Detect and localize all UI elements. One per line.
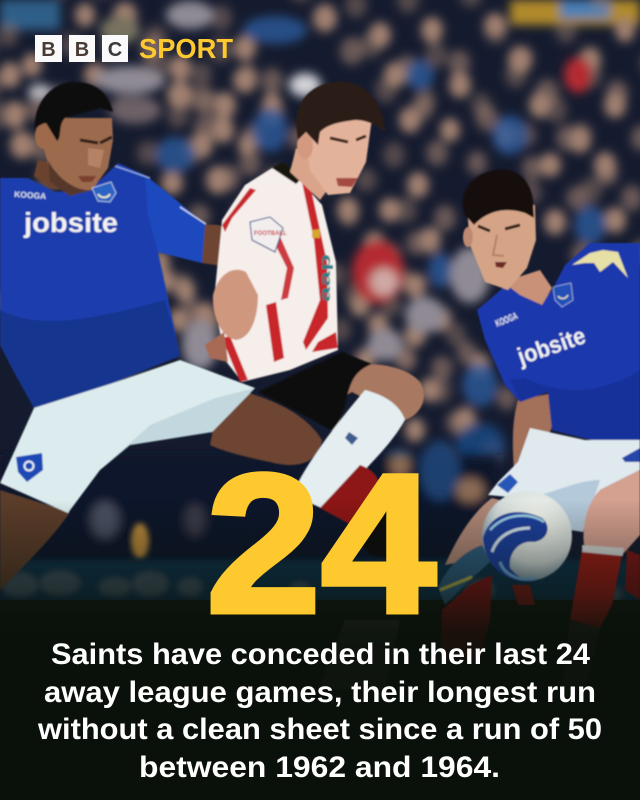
shirt badge (92, 182, 116, 202)
chest badge (312, 229, 320, 238)
lower leg dark (348, 492, 400, 560)
shorts badge (16, 453, 43, 482)
kit maker text: KOOGA (14, 189, 47, 201)
big number: 24 (206, 433, 436, 654)
neck (503, 270, 552, 305)
shorts (488, 428, 640, 530)
caption text (37, 638, 602, 784)
face (467, 205, 536, 290)
shirt sponsor: jobsite (23, 207, 118, 238)
BBC Sport logo: C (108, 39, 122, 61)
striped shirt (214, 168, 338, 382)
caption text: without a clean sheet since a run of 50 (37, 713, 602, 746)
hair (296, 82, 385, 145)
caption text: between 1962 and 1964. (139, 751, 500, 784)
white sock (292, 390, 405, 512)
BBC Sport logo: B (75, 39, 89, 61)
BBC Sport logo: SPORT (139, 33, 233, 64)
crowd heads (0, 2, 635, 442)
neck (34, 160, 92, 192)
player: Southampton midfielder, centre (205, 82, 424, 560)
other arm towards ball (445, 498, 500, 565)
left thigh and back leg (0, 490, 70, 590)
shirt badge (553, 283, 573, 307)
dark gradient overlay (0, 500, 640, 800)
shirt sponsor: jobsite (513, 322, 589, 371)
player: Southampton midfielder, centre: FOOTBALL (254, 231, 287, 237)
shirt (0, 163, 206, 408)
red socks (440, 575, 492, 660)
arm (513, 392, 558, 470)
BBC Sport logo (35, 33, 233, 64)
advertising board (0, 560, 640, 603)
knee and leg (583, 470, 640, 553)
BBC Sport logo: B (41, 39, 56, 61)
dark lower stand (0, 440, 500, 565)
sleeve patch (250, 217, 283, 252)
black shorts (258, 352, 372, 432)
arm and hand (202, 225, 290, 302)
hair (35, 82, 113, 141)
lower leg in shadow (562, 622, 600, 690)
shorts (0, 360, 255, 513)
face (302, 115, 372, 195)
kit maker text: KOOGA (494, 311, 519, 330)
back knee thigh (338, 364, 424, 420)
shirt sponsor fragment: aap (317, 254, 334, 302)
ball (482, 491, 572, 581)
shirt (477, 243, 640, 442)
player: Portsmouth defender, left (0, 82, 322, 590)
forearm and fist (213, 270, 258, 340)
face (44, 118, 113, 193)
player: Portsmouth defender, right (318, 170, 640, 690)
caption text: Saints have conceded in their last 24 (51, 638, 590, 671)
hair (463, 170, 534, 225)
neck (290, 148, 336, 200)
red sock (320, 465, 382, 527)
boot (438, 545, 490, 605)
shirt collar (272, 162, 302, 184)
sleeve trim (180, 207, 206, 224)
kappa logo (572, 250, 628, 278)
caption text: away league games, their longest run (44, 676, 596, 709)
